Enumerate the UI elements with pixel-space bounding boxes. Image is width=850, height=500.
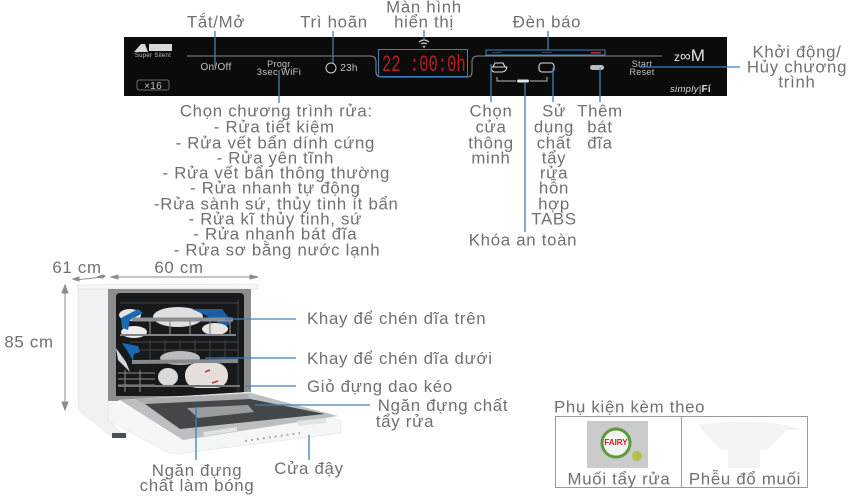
label: door: Cửa đậy	[274, 459, 344, 478]
label: wash programs: - Rửa vết bẩn thông thường	[163, 164, 390, 182]
top plate	[77, 284, 258, 289]
label: wash programs: - Rửa sơ bằng nước lạnh	[174, 240, 380, 260]
label: on/off: Tắt/Mở	[187, 12, 245, 32]
display screen: 22 :00:0h	[382, 52, 466, 78]
door inner steel	[120, 393, 338, 440]
side wall	[78, 288, 125, 437]
energy rating badge	[134, 44, 172, 59]
dimension arrows	[62, 275, 258, 410]
label: rinse aid: chất làm bóng	[140, 476, 254, 495]
label: wash programs: - Rửa kĩ thủy tinh, sứ	[189, 210, 362, 228]
label: add dishes: đĩa	[587, 134, 613, 152]
label: detergent compartment: tẩy rửa	[376, 412, 434, 431]
label: combined detergent: hỗn	[539, 178, 569, 198]
icon: delay clock	[326, 63, 336, 73]
icon: lock	[517, 80, 529, 82]
label: delay: Trì hoãn	[300, 12, 368, 32]
energy rating badge: Super Silent	[135, 53, 171, 59]
label: display: hiển thị	[394, 12, 454, 32]
icon: wifi	[419, 40, 429, 47]
label: combined detergent: chất	[537, 134, 571, 152]
label: combined detergent: tẩy	[542, 148, 566, 168]
dimension: depth: 61 cm	[52, 258, 102, 277]
rack grid texture	[120, 300, 238, 395]
cavity interior	[116, 293, 244, 396]
dimension: height: 85 cm	[4, 332, 54, 352]
upper rack dishes	[119, 307, 236, 338]
label: smart door: thông	[468, 134, 514, 152]
label: start/cancel: Khởi động/	[752, 42, 842, 62]
label: wash programs: - Rửa tiết kiệm	[214, 118, 335, 136]
label: start/cancel: trình	[778, 72, 816, 92]
label: add dishes: Thêm	[577, 102, 623, 120]
door controls	[245, 433, 300, 441]
label: wash programs: - Rửa vết bẩn dính cứng	[176, 134, 375, 152]
open door body	[108, 392, 341, 454]
label: child lock: Khóa an toàn	[469, 230, 577, 250]
icon: smart door	[491, 63, 507, 72]
dimension: width: 60 cm	[154, 258, 204, 277]
label: lower rack: Khay để chén dĩa dưới	[307, 349, 493, 368]
dishwasher	[77, 284, 341, 454]
place settings badge: ×16	[144, 81, 162, 92]
foot	[112, 433, 126, 438]
reset label: Reset	[629, 67, 655, 77]
child lock connector	[497, 77, 547, 81]
control panel	[124, 37, 727, 96]
icon: tabs	[539, 63, 554, 72]
accessory: salt package: FAIRY	[604, 438, 628, 447]
label: smart door: minh	[471, 148, 511, 168]
label: combined detergent: rửa	[540, 164, 568, 182]
label: wash programs: - Rửa nhanh bát đĩa	[193, 224, 357, 244]
label: upper rack: Khay để chén dĩa trên	[307, 309, 486, 328]
door handle strip	[203, 418, 326, 436]
start label: Start	[632, 59, 652, 69]
simply fi logo: simply|Fí	[670, 84, 712, 95]
label: accessories heading: Phụ kiện kèm theo	[554, 398, 705, 416]
label: funnel: Phễu đổ muối	[689, 470, 801, 488]
on/off button label: On/Off	[200, 62, 232, 73]
zoom logo: z∞M	[674, 46, 705, 65]
accessory: funnel	[698, 422, 803, 468]
door top band	[135, 394, 250, 404]
accessories table	[556, 416, 808, 488]
label: wash programs: Chọn chương trình rửa:	[180, 102, 373, 120]
label: salt: Muối tẩy rửa	[568, 470, 670, 488]
label: smart door: Chọn	[470, 102, 512, 120]
callout lines: control panel	[215, 30, 740, 232]
callout lines: dishwasher	[196, 319, 370, 460]
label: combined detergent: TABS	[531, 210, 577, 228]
icon: add dishes	[590, 65, 604, 70]
door inner dark	[145, 399, 325, 429]
label: indicator: Đèn báo	[513, 12, 581, 32]
label: combined detergent: hợp	[538, 194, 570, 214]
delay value: 23h	[340, 63, 358, 74]
label: combined detergent: Sử	[542, 102, 566, 120]
label: combined detergent: dụng	[534, 118, 574, 136]
program button label: Progr.	[267, 59, 293, 69]
place settings badge	[137, 80, 169, 92]
label: detergent compartment: Ngăn đựng chất	[378, 396, 508, 415]
lower rack dishes	[116, 343, 240, 392]
label: start/cancel: Hủy chương	[747, 58, 847, 76]
label: wash programs: -Rửa sành sứ, thủy tinh ít bẩn	[154, 194, 399, 214]
wifi button label: 3sec WiFi	[257, 67, 301, 78]
cavity frame	[108, 289, 251, 401]
label: wash programs: - Rửa yên tĩnh	[217, 148, 334, 168]
accessory: salt package	[587, 421, 648, 468]
label: rinse aid: Ngăn đựng	[152, 461, 242, 480]
detergent compartment	[187, 405, 254, 418]
label: cutlery basket: Giỏ đựng dao kéo	[307, 377, 453, 396]
label: wash programs: - Rửa nhanh tự động	[190, 178, 361, 198]
indicator lights	[486, 50, 605, 55]
label: add dishes: bát	[587, 118, 613, 136]
label: smart door: cửa	[475, 118, 507, 136]
